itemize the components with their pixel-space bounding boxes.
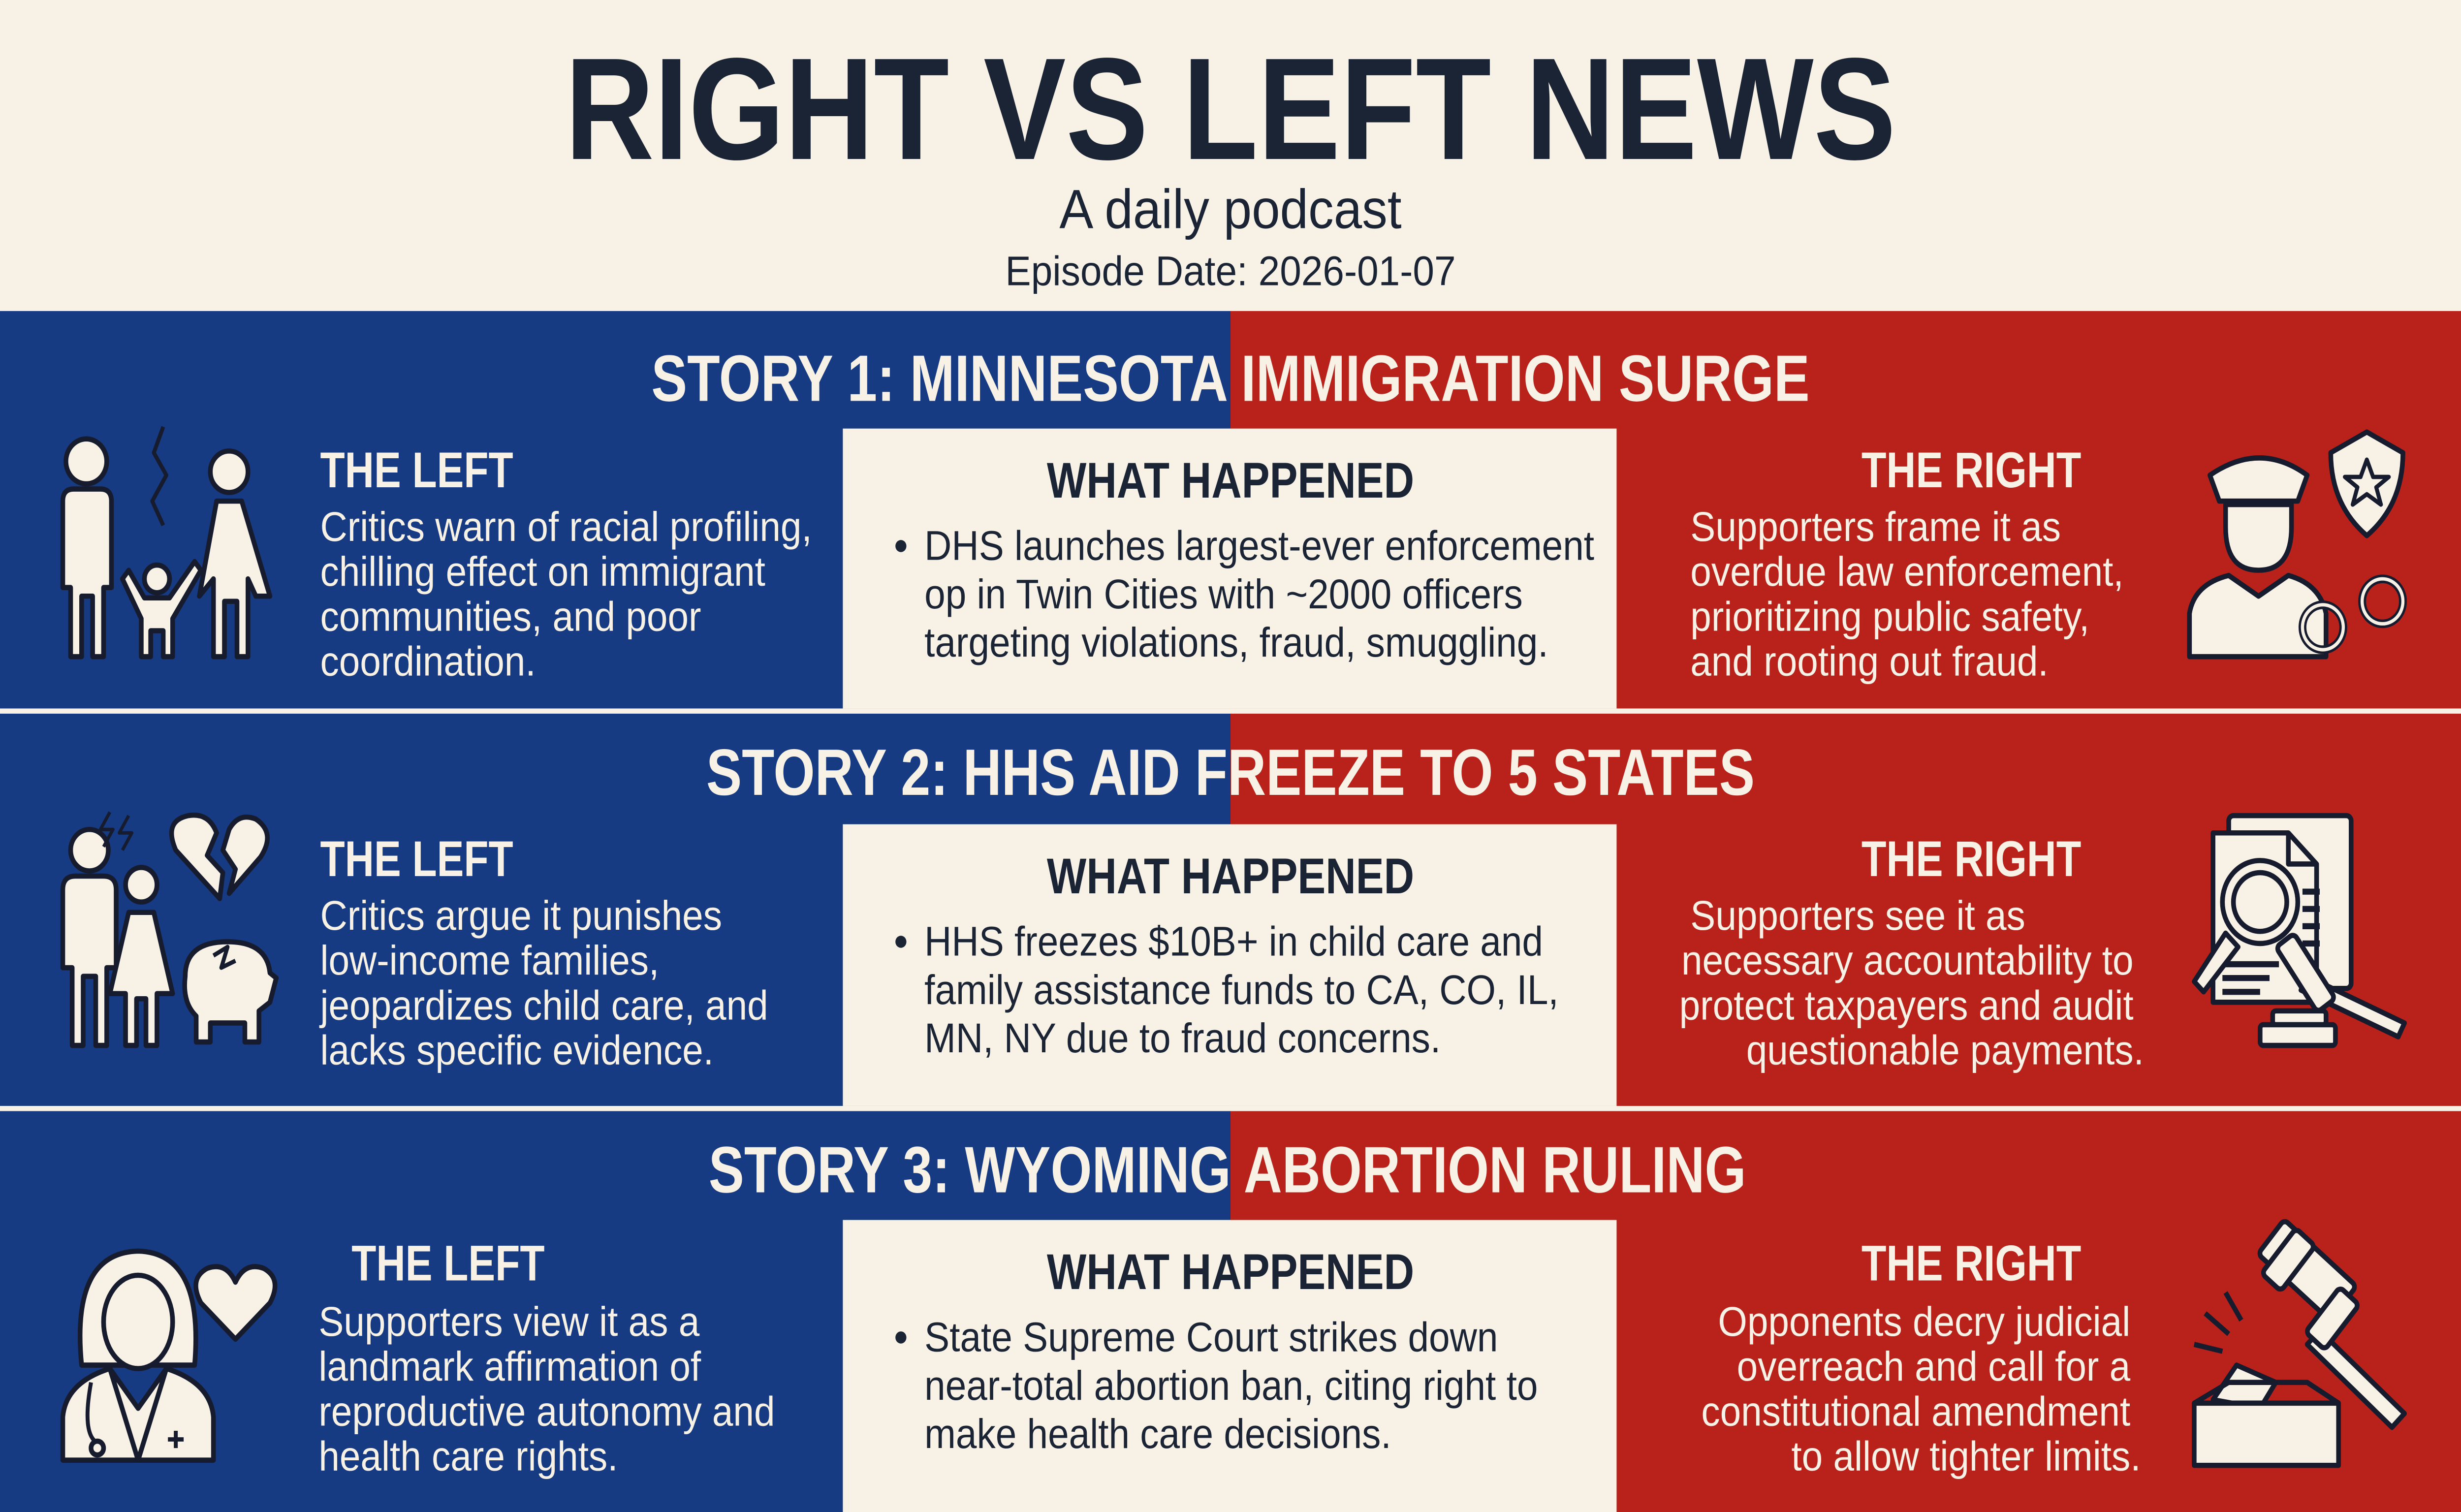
icon: family (63, 427, 270, 657)
panel: story 3 left (318, 1235, 786, 1480)
panel: story 1 right: and rooting out fraud. (1690, 638, 2049, 685)
icon: police officer (2189, 432, 2403, 657)
icon: family with broken heart and piggy bank (63, 812, 276, 1045)
panel: story 3 what happened: make health care decisions. (924, 1411, 1391, 1457)
panel: story 2 right: Supporters see it as (1690, 892, 2025, 939)
panel: story 1 right (1690, 442, 2134, 685)
panel: story 3 right: THE RIGHT (1862, 1235, 2081, 1292)
panel: story 1 right: overdue law enforcement, (1690, 549, 2124, 595)
story 1 title: STORY 1: MINNESOTA IMMIGRATION SURGE (651, 342, 1810, 415)
story 3 band (0, 1111, 2461, 1512)
panel: story 3 right: overreach and call for a (1737, 1344, 2130, 1390)
icon: doctor with heart (63, 1251, 275, 1460)
title: RIGHT VS LEFT NEWS (565, 28, 1896, 190)
panel: story 3 what happened: State Supreme Court strikes down (924, 1314, 1498, 1360)
panel: story 2 right: protect taxpayers and audit (1679, 982, 2134, 1029)
panel: story 2 what happened (843, 824, 1616, 1106)
panel: story 2 right: questionable payments. (1746, 1027, 2144, 1074)
panel: story 3 right (1701, 1235, 2141, 1480)
panel: story 1 what happened: targeting violations, fraud, smuggling. (924, 620, 1548, 666)
panel: story 1 right: Supporters frame it as (1690, 504, 2061, 550)
panel: story 3 left: landmark affirmation of (318, 1344, 701, 1390)
panel: story 2 right: THE RIGHT (1862, 831, 2081, 887)
panel: story 3 right: Opponents decry judicial (1718, 1299, 2130, 1345)
panel: story 2 left: Critics argue it punishes (320, 892, 722, 939)
icon: gavel and ballot box (2194, 1220, 2404, 1465)
panel: story 3 what happened: WHAT HAPPENED (1047, 1244, 1414, 1300)
panel: story 1 left: communities, and poor (320, 594, 701, 640)
panel: story 3 left: THE LEFT (351, 1235, 545, 1292)
panel: story 1 left: Critics warn of racial profiling, (320, 504, 812, 550)
panel: story 1 right: THE RIGHT (1862, 442, 2081, 498)
panel: story 1 what happened (843, 429, 1616, 708)
panel: story 2 what happened: MN, NY due to fraud concerns. (924, 1015, 1441, 1062)
panel: story 1 right: prioritizing public safety, (1690, 594, 2089, 640)
subtitle: A daily podcast (1059, 178, 1402, 240)
panel: story 1 left: coordination. (320, 638, 536, 685)
header (565, 28, 1896, 294)
panel: story 2 left (319, 831, 779, 1074)
panel: story 1 left (320, 442, 822, 685)
panel: story 3 right: to allow tighter limits. (1791, 1433, 2141, 1480)
panel: story 1 left: THE LEFT (320, 442, 513, 498)
panel: story 2 left: THE LEFT (320, 831, 513, 887)
panel: story 3 what happened (843, 1220, 1616, 1512)
panel: story 2 right: necessary accountability to (1681, 938, 2134, 984)
story 3 title: STORY 3: WYOMING ABORTION RULING (709, 1134, 1746, 1207)
panel: story 3 left: Supporters view it as a (318, 1299, 700, 1345)
icon: audit document magnifier gavel (2194, 816, 2404, 1045)
panel: story 2 left: lacks specific evidence. (320, 1027, 714, 1074)
story 2 band (0, 714, 2461, 1106)
panel: story 3 left: reproductive autonomy and (318, 1388, 775, 1435)
panel: story 2 what happened: WHAT HAPPENED (1047, 848, 1414, 904)
panel: story 2 what happened: family assistance funds to CA, CO, IL, (924, 967, 1559, 1013)
panel: story 3 right: constitutional amendment (1701, 1388, 2130, 1435)
story 1 band (0, 311, 2461, 708)
panel: story 2 right (1679, 831, 2144, 1074)
panel: story 2 left: low-income families, (320, 938, 659, 984)
panel: story 2 what happened: HHS freezes $10B+ in child care and (924, 918, 1543, 965)
episode date: Episode Date: 2026-01-07 (1005, 248, 1456, 294)
panel: story 3 what happened: near-total abortion ban, citing right to (924, 1362, 1538, 1409)
panel: story 1 what happened: op in Twin Cities with ~2000 officers (924, 571, 1523, 618)
panel: story 3 left: health care rights. (318, 1433, 618, 1480)
panel: story 1 what happened: WHAT HAPPENED (1047, 452, 1414, 508)
story 2 title: STORY 2: HHS AID FREEZE TO 5 STATES (706, 736, 1755, 809)
panel: story 2 left: jeopardizes child care, and (319, 982, 768, 1029)
panel: story 1 left: chilling effect on immigrant (320, 549, 765, 595)
panel: story 1 what happened: DHS launches largest-ever enforcement (924, 523, 1594, 569)
